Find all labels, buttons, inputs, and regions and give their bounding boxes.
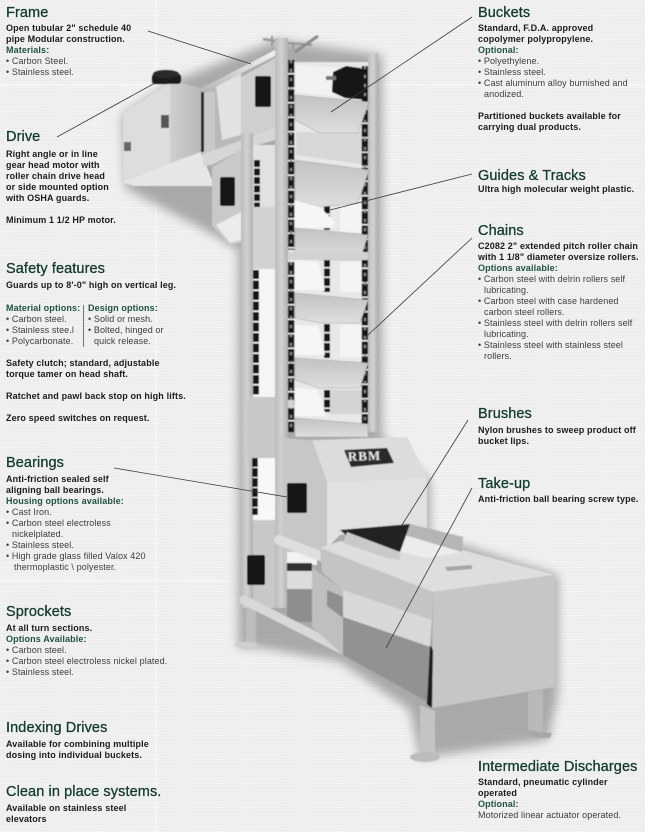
section: Brushes: Brushes [478, 406, 532, 422]
section: Bearings: • High grade glass filled Valox 420 [6, 551, 146, 561]
section: Frame: Materials: [6, 45, 49, 55]
section: Safety features: • Solid or mesh. [88, 314, 153, 324]
section: Frame [6, 5, 131, 77]
section: Frame: Frame [6, 5, 48, 21]
section: Frame: • Stainless steel. [6, 67, 74, 77]
section: Buckets: • Cast aluminum alloy burnished and [478, 78, 628, 88]
section: Buckets: carrying dual products. [478, 122, 581, 132]
section: Clean in place systems [6, 784, 161, 824]
section: Safety features: • Carbon steel. [6, 314, 67, 324]
section: Sprockets: • Carbon steel electroless nickel plated. [6, 656, 167, 666]
section: Indexing Drives: dosing into individual buckets. [6, 750, 142, 760]
section: Bearings: • Cast Iron. [6, 507, 52, 517]
section: Buckets: Buckets [478, 5, 530, 21]
icon: lower tower bearing [247, 555, 265, 585]
front leg [410, 705, 440, 762]
section: Chains: lubricating. [484, 285, 529, 295]
tower leg [235, 607, 259, 648]
boot housing [282, 437, 427, 565]
back of elevator [288, 62, 368, 432]
section: Chains: • Stainless steel with stainless steel [478, 340, 623, 350]
section: Buckets: Standard, F.D.A. approved [478, 23, 593, 33]
section: Buckets: Partitioned buckets available for [478, 111, 621, 121]
icon: head bearings [220, 76, 271, 206]
section: Safety features: Safety clutch; standard, adjustable [6, 358, 160, 368]
section: Brushes: bucket lips. [478, 436, 529, 446]
logo plate: RBM: RBM [348, 448, 381, 464]
section: Safety features: Zero speed switches on request. [6, 413, 150, 423]
section: Drive: with OSHA guards. [6, 193, 89, 203]
section: Indexing Drives [6, 720, 149, 760]
upper tube rail [279, 540, 320, 556]
right column [368, 53, 378, 432]
left guard window with chain [253, 269, 275, 520]
chains: inner return [324, 196, 330, 412]
right main box [320, 541, 555, 708]
frame: lower head plate [212, 145, 275, 245]
section: Safety features: • Bolted, hinged or [88, 325, 164, 335]
section: Chains: lubricating. [484, 329, 529, 339]
section: Buckets: Optional: [478, 45, 519, 55]
section: Buckets: anodized. [484, 89, 524, 99]
section: Intermediate Discharges: Optional: [478, 799, 519, 809]
leader lines [57, 17, 472, 648]
section: Take-up [478, 476, 638, 504]
section: Bearings: thermoplastic \ polyester. [14, 562, 116, 572]
section: Frame: • Carbon Steel. [6, 56, 68, 66]
section: Safety features: torque tamer on head shaft. [6, 369, 128, 379]
left column [241, 133, 253, 608]
chain: right [362, 66, 368, 430]
logo plate: RBM [344, 448, 394, 467]
section: Chains: C2082 2" extended pitch roller chain [478, 241, 638, 251]
vertical plates [247, 207, 368, 608]
machine shadow [122, 40, 558, 758]
section: Chains: carbon steel rollers. [484, 307, 565, 317]
section: Safety features: Material options: [6, 303, 80, 313]
section: Buckets [478, 5, 628, 132]
section: Safety features [6, 261, 186, 423]
section: Drive: Drive [6, 129, 40, 145]
frame: upper head [201, 50, 275, 166]
section: Bearings: nickelplated. [12, 529, 63, 539]
buckets [295, 95, 369, 437]
section: Take-up: Anti-friction ball bearing screw type. [478, 494, 638, 504]
section: Drive: Right angle or in line [6, 149, 98, 159]
drive guard box [123, 80, 212, 186]
section: Frame: pipe Modular construction. [6, 34, 125, 44]
section: Clean in place systems: elevators [6, 814, 47, 824]
section: Chains: • Carbon steel with case hardened [478, 296, 619, 306]
icon: head sprocket and bracket [326, 66, 368, 100]
section: Indexing Drives: Available for combining multiple [6, 739, 149, 749]
section: Drive [6, 129, 116, 225]
section: Bearings: Bearings [6, 455, 64, 471]
section: Sprockets: Sprockets [6, 604, 71, 620]
chain: main [288, 60, 294, 432]
section: Buckets: • Stainless steel. [478, 67, 546, 77]
section: Bearings: aligning ball bearings. [6, 485, 104, 495]
section: Take-up: Take-up [478, 476, 530, 492]
section: Chains: Options available: [478, 263, 558, 273]
section: Guides and Tracks [478, 168, 634, 194]
take-up side section [312, 567, 343, 655]
section: Drive: or side mounted option [6, 182, 109, 192]
section: Safety features: quick release. [94, 336, 151, 346]
gap under boot with motor [287, 552, 317, 622]
section: Bearings [6, 455, 146, 572]
section: Safety features: • Stainless stee.l [6, 325, 74, 335]
icon: brush hopper [340, 524, 463, 560]
section: Sprockets: • Stainless steel. [6, 667, 74, 677]
section: Buckets: • Polyethylene. [478, 56, 539, 66]
section: Chains: Chains [478, 223, 524, 239]
section: Guides and Tracks: Ultra high molecular weight plastic. [478, 184, 634, 194]
section: Frame: Open tubular 2" schedule 40 [6, 23, 131, 33]
icon: bearing at boot [287, 483, 307, 513]
section: Intermediate Discharges: Intermediate Discharges [478, 759, 637, 775]
section: Clean in place systems: Clean in place systems. [6, 784, 161, 800]
section: Chains: • Carbon steel with delrin rollers self [478, 274, 625, 284]
section: Drive: roller chain drive head [6, 171, 105, 181]
lower tube rail [244, 600, 343, 650]
section: Safety features: Guards up to 8'-0" high on vertical leg. [6, 280, 176, 290]
section: Sprockets: Options Available: [6, 634, 87, 644]
icon: drive motor [152, 70, 181, 84]
section: Bearings: Housing options available: [6, 496, 124, 506]
section: Intermediate Discharges [478, 759, 637, 820]
main column [275, 38, 288, 608]
section: Indexing Drives: Indexing Drives [6, 720, 107, 736]
section: Safety features: Safety features [6, 261, 105, 277]
section: Safety features: Design options: [88, 303, 158, 313]
section: Drive: gear head motor with [6, 160, 100, 170]
section: Chains: rollers. [484, 351, 512, 361]
frame top bracket [263, 36, 318, 52]
section: Intermediate Discharges: Motorized linear actuator operated. [478, 810, 621, 820]
section: Intermediate Discharges: operated [478, 788, 517, 798]
section: Brushes: Nylon brushes to sweep product off [478, 425, 636, 435]
section: Buckets: copolymer polypropylene. [478, 34, 593, 44]
section: Intermediate Discharges: Standard, pneumatic cylinder [478, 777, 608, 787]
section: Guides and Tracks: Guides & Tracks [478, 168, 586, 184]
section: Bearings: Anti-friction sealed self [6, 474, 109, 484]
section: Chains: with 1 1/8" diameter oversize rollers. [478, 252, 639, 262]
section: Safety features: Ratchet and pawl back stop on high lifts. [6, 391, 186, 401]
section: Chains: • Stainless steel with delrin rollers self [478, 318, 632, 328]
section: Safety features: • Polycarbonate. [6, 336, 73, 346]
section: Bearings: • Carbon steel electroless [6, 518, 111, 528]
section: Bearings: • Stainless steel. [6, 540, 74, 550]
section: Sprockets: At all turn sections. [6, 623, 92, 633]
section: Sprockets [6, 604, 167, 677]
section: Sprockets: • Carbon steel. [6, 645, 67, 655]
section: Brushes [478, 406, 636, 446]
right leg [520, 690, 552, 738]
section: Chains [478, 223, 639, 361]
section: Clean in place systems: Available on stainless steel [6, 803, 126, 813]
section: Drive: Minimum 1 1/2 HP motor. [6, 215, 116, 225]
